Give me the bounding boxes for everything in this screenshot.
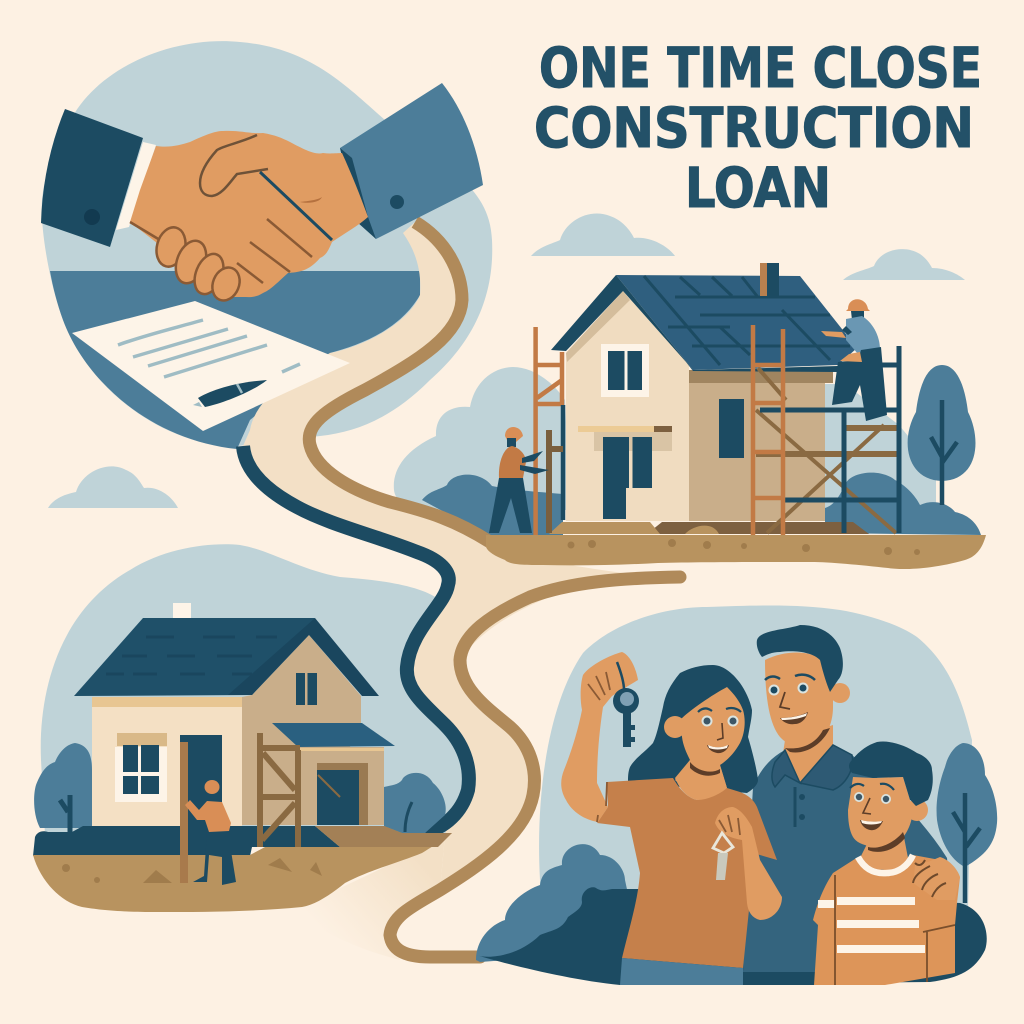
jeans bbox=[620, 958, 743, 985]
worker at ladder bbox=[489, 427, 549, 533]
clouds bbox=[48, 213, 965, 508]
panel: handshake and signing bbox=[41, 83, 483, 431]
man collar bbox=[772, 745, 853, 790]
woman neck bbox=[675, 760, 727, 800]
soil specks bbox=[143, 858, 322, 883]
stripes bbox=[818, 901, 925, 949]
left sleeve bbox=[41, 109, 143, 247]
handshake hands bbox=[130, 131, 368, 305]
panel: house under construction bbox=[486, 263, 986, 569]
fading road end bbox=[300, 835, 445, 960]
boy bbox=[813, 742, 960, 985]
man hair bbox=[757, 625, 843, 692]
wooden frame bbox=[258, 733, 300, 847]
panel backdrop: construction site hill, bushes and tree bbox=[394, 365, 981, 535]
man hand on shoulder bbox=[913, 857, 960, 900]
fingers bbox=[152, 224, 244, 305]
front window bbox=[601, 344, 649, 397]
man face bbox=[765, 675, 815, 724]
worker with post bbox=[180, 742, 236, 885]
dark plot bbox=[647, 522, 869, 534]
brown ground bbox=[33, 826, 452, 912]
chimney bbox=[760, 263, 768, 296]
gable window bbox=[296, 673, 317, 705]
front wall bbox=[566, 291, 689, 521]
roof bbox=[616, 275, 857, 370]
man head bbox=[765, 652, 833, 747]
blob backdrop bbox=[539, 605, 972, 910]
left cuff bbox=[116, 142, 156, 230]
woman bbox=[561, 652, 782, 985]
panel backdrop: unfinished house sky bbox=[41, 544, 470, 835]
left tree bbox=[34, 743, 92, 833]
mounds bbox=[549, 522, 719, 534]
lower brown line bbox=[390, 577, 680, 957]
bushes bbox=[476, 844, 640, 962]
woman hair bbox=[628, 665, 758, 793]
right bush bbox=[384, 773, 446, 833]
side window bbox=[719, 399, 744, 458]
panel: happy family with keys bbox=[476, 605, 997, 985]
navy line bbox=[243, 446, 469, 832]
panel: unfinished house bbox=[33, 603, 452, 912]
contract paper bbox=[72, 301, 350, 431]
boy face bbox=[850, 784, 894, 830]
worker on roof bbox=[821, 299, 887, 421]
porch roof bbox=[272, 723, 395, 747]
woman face bbox=[698, 708, 741, 753]
side wall bbox=[689, 370, 825, 521]
hand lower edge bbox=[130, 222, 160, 240]
door bbox=[180, 735, 222, 827]
pen bbox=[198, 380, 267, 407]
walls bbox=[92, 697, 242, 826]
soil specks bbox=[568, 539, 920, 555]
title bbox=[534, 36, 982, 220]
winding road bbox=[243, 222, 680, 960]
right scaffold bbox=[753, 325, 899, 535]
thumb outline bbox=[200, 135, 268, 196]
left scaffold bbox=[536, 327, 563, 535]
window bbox=[115, 733, 167, 802]
right sleeve bbox=[340, 83, 483, 239]
raised key bbox=[613, 662, 639, 747]
boy neck bbox=[860, 832, 908, 870]
door and lintel bbox=[578, 426, 672, 519]
title: CONSTRUCTION bbox=[534, 96, 974, 160]
boy collar bbox=[858, 855, 913, 873]
tan road surface bbox=[243, 222, 640, 890]
man neck bbox=[782, 725, 833, 783]
boy shirt bbox=[813, 855, 960, 985]
navy ground bbox=[476, 887, 987, 985]
navy ground strip bbox=[33, 826, 340, 856]
upper brown line bbox=[309, 222, 490, 542]
woman head bbox=[680, 687, 745, 770]
boy head bbox=[848, 777, 912, 847]
man body bbox=[743, 745, 950, 972]
man bbox=[743, 625, 950, 985]
boy hair bbox=[849, 742, 933, 806]
tree bbox=[937, 743, 997, 903]
garage bbox=[317, 763, 368, 825]
chimney bbox=[173, 603, 191, 619]
woman shirt bbox=[597, 778, 777, 968]
ground bbox=[486, 535, 986, 569]
lower forearm and hand bbox=[715, 807, 782, 920]
roof bbox=[74, 618, 315, 696]
title: LOAN bbox=[685, 156, 831, 220]
arm seams bbox=[835, 875, 955, 985]
lower key bbox=[713, 833, 733, 880]
raised arm bbox=[561, 652, 638, 822]
woman neck top bbox=[675, 760, 727, 800]
panel backdrop: handshake circle and sea bbox=[42, 41, 492, 449]
